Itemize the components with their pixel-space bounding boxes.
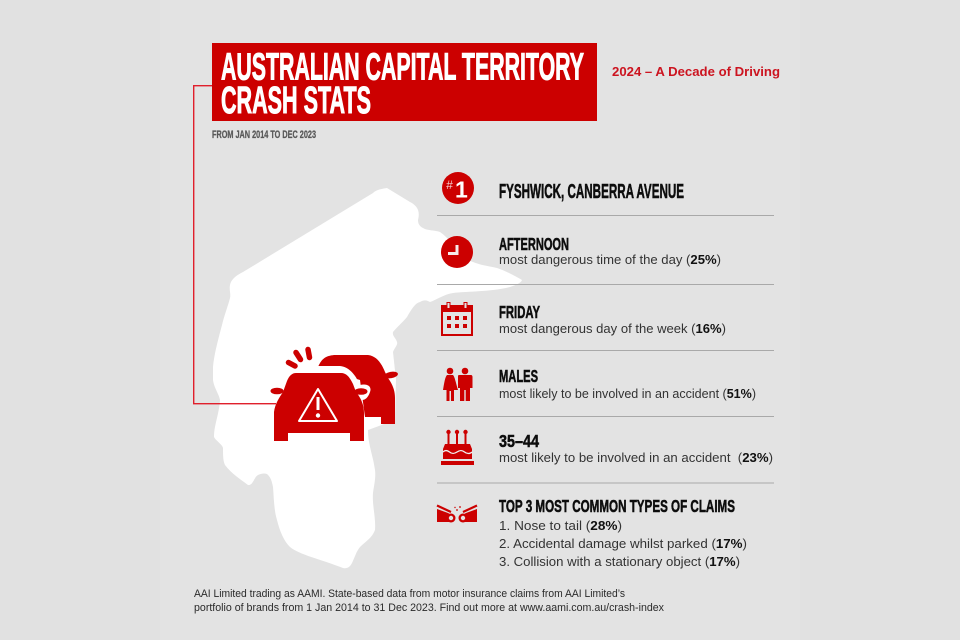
icon: head-on collision <box>437 506 477 522</box>
row 4: gender: MALES <box>499 366 538 386</box>
icon: clock <box>441 236 473 268</box>
title block: AUSTRALIAN CAPITAL TERRITORY <box>221 46 584 88</box>
map: Australian Capital Territory <box>213 188 522 568</box>
row 4: gender: most likely to be involved in an accident (51%) <box>499 386 756 401</box>
row 6: claims: 1. Nose to tail ( 28%) <box>499 518 622 533</box>
title block: CRASH STATS <box>221 80 371 122</box>
warning triangle <box>299 389 337 421</box>
impact dashes <box>288 350 310 366</box>
row 6: claims <box>437 496 747 569</box>
icon: number one: # <box>446 178 453 192</box>
connector line <box>193 85 276 404</box>
front car <box>274 373 364 441</box>
footer note: portfolio of brands from 1 Jan 2014 to 31 Dec 2023. Find out more at www.aami.com.au/crash-index <box>194 602 665 614</box>
tagline: 2024 – A Decade of Driving <box>612 64 780 79</box>
icon: calendar <box>441 302 473 335</box>
row 5: age: most likely to be involved in an accident ( 23%) <box>499 450 773 465</box>
row 6: claims: 3. Collision with a stationary object (17%) <box>499 554 740 569</box>
icon: number one <box>442 172 474 204</box>
row 3: day of week: most dangerous day of the week (16%) <box>499 321 726 336</box>
row 2: time of day: most dangerous time of the day (25%) <box>499 252 721 267</box>
row 6: claims: 2. Accidental damage whilst parked ( 17%) <box>499 536 747 551</box>
footer note: AAI Limited trading as AAMI. State-based data from motor insurance claims from AAI Limited’s <box>194 588 626 600</box>
row 4: gender <box>443 366 756 401</box>
row 5: age <box>441 430 773 465</box>
row 3: day of week <box>441 302 726 336</box>
row 2: time of day: AFTERNOON <box>499 234 569 254</box>
title block <box>212 43 597 122</box>
row 5: age: 35–44 <box>499 431 539 451</box>
row 1: location: FYSHWICK, CANBERRA AVENUE <box>499 181 684 203</box>
row 2: time of day <box>441 234 721 268</box>
footer note <box>194 588 665 614</box>
icon: birthday cake <box>441 430 474 465</box>
icon: woman and man <box>443 368 472 401</box>
row 6: claims: TOP 3 MOST COMMON TYPES OF CLAIMS <box>499 496 735 516</box>
car crash illustration <box>270 350 398 442</box>
date range: FROM JAN 2014 TO DEC 2023 <box>212 129 316 141</box>
white outline <box>280 366 371 442</box>
row 3: day of week: FRIDAY <box>499 302 540 322</box>
rear car <box>318 355 395 424</box>
row 1: location <box>442 172 684 204</box>
icon: number one: 1 <box>455 176 468 202</box>
